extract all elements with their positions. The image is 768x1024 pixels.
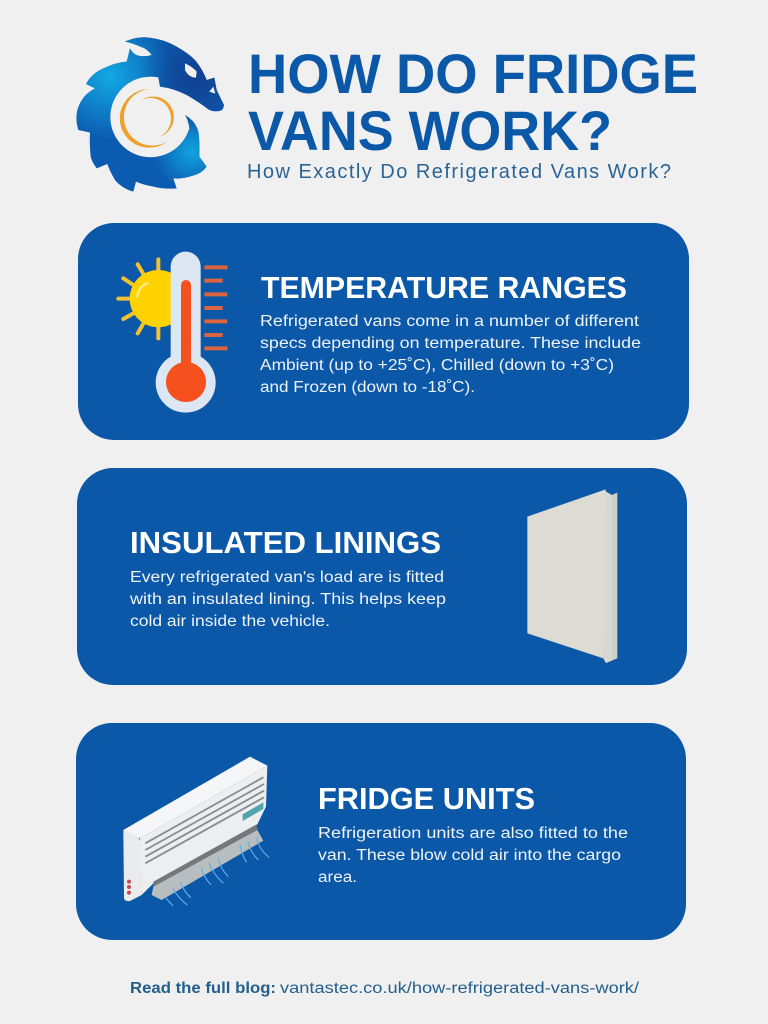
panel: fridge units xyxy=(76,723,686,940)
heading: insulated linings: INSULATED LININGS xyxy=(130,525,441,560)
title: VANS WORK? xyxy=(248,99,612,162)
text: temperature ranges body: Refrigerated vans come in a number of different xyxy=(260,313,640,330)
heading: fridge units: FRIDGE UNITS xyxy=(318,781,535,816)
icon: thermometer and sun xyxy=(118,252,227,413)
title: HOW DO FRIDGE xyxy=(248,42,698,105)
text: fridge units body: Refrigeration units are also fitted to the xyxy=(318,825,628,842)
text: fridge units body: area. xyxy=(318,869,357,886)
text: fridge units body: van. These blow cold air into the cargo xyxy=(318,847,621,864)
text: insulated linings body: Every refrigerated van's load are is fitted xyxy=(130,569,444,586)
text: temperature ranges body: specs depending on temperature. These include xyxy=(260,335,641,352)
footer: blog link xyxy=(130,980,640,997)
text: temperature ranges body: Ambient (up to +25˚C), Chilled (down to +3˚C) xyxy=(260,357,614,374)
footer: blog link: Read the full blog: xyxy=(130,980,276,997)
text: insulated linings body xyxy=(129,569,446,630)
icon: insulated panel xyxy=(527,489,617,663)
text: insulated linings body: with an insulated lining. This helps keep xyxy=(129,591,446,608)
text: fridge units body xyxy=(318,825,628,886)
text: insulated linings body: cold air inside the vehicle. xyxy=(130,613,330,630)
text: temperature ranges body: and Frozen (down to -18˚C). xyxy=(260,379,475,396)
title xyxy=(248,42,698,162)
logo: blue dragon xyxy=(76,37,224,192)
heading: temperature ranges: TEMPERATURE RANGES xyxy=(261,270,627,305)
panel: insulated linings xyxy=(77,468,687,685)
panel: temperature ranges xyxy=(78,223,689,440)
subtitle: How Exactly Do Refrigerated Vans Work? xyxy=(247,161,671,183)
text: temperature ranges body xyxy=(260,313,641,396)
footer: blog link: vantastec.co.uk/how-refrigerated-vans-work/ xyxy=(280,980,640,997)
logo nostril xyxy=(209,87,215,94)
logo eye xyxy=(185,63,197,78)
logo swirl: orange xyxy=(120,89,174,148)
icon: air conditioning unit xyxy=(123,757,269,906)
